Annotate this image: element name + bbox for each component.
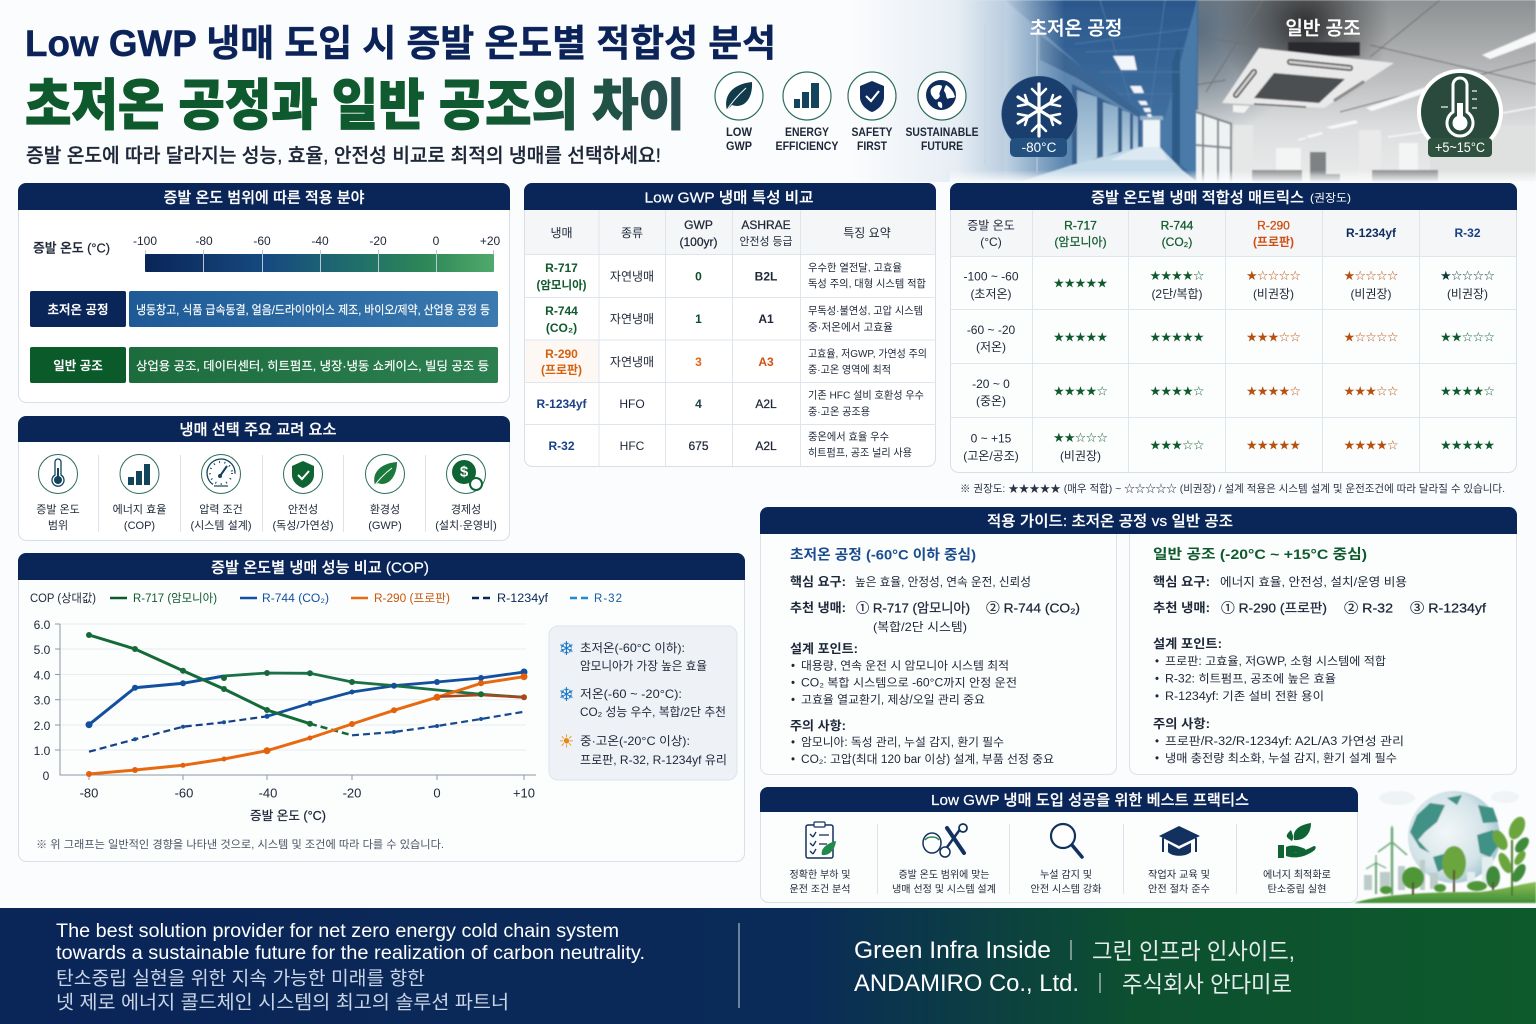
- guide column: ultra-low: ② R-744 (CO₂): [986, 600, 1080, 616]
- hero photo: ultra-low temperature corridor: [850, 0, 1197, 182]
- practice: worker education mortarboard: 안전 절차 준수: [1148, 882, 1210, 896]
- factor: safety: 안전성: [288, 503, 318, 516]
- guide column: ultra-low: •: [791, 660, 795, 672]
- guide column: general AC: 핵심 요구:: [1153, 574, 1210, 589]
- panel: key selection factors: 냉매 선택 주요 교려 요소: [180, 422, 337, 438]
- line chart: 4.0: [34, 668, 51, 682]
- row R-717: 우수한 열전달, 고효율: [808, 262, 902, 274]
- matrix row -20 to 0: ★★★★☆: [1150, 384, 1204, 400]
- matrix header: (암모니아): [1054, 235, 1107, 249]
- guide column: general AC: 프로판/R-32/R-1234yf: A2L/A3 가연성 관리: [1165, 735, 1404, 748]
- factor: economy: 경제성: [451, 503, 481, 516]
- guide column: ultra-low: 대용량, 연속 운전 시 암모니아 시스템 최적: [801, 660, 1009, 672]
- guide column: general AC: •: [1155, 674, 1159, 686]
- matrix row 0 to +15: ★★★☆☆: [1150, 438, 1204, 454]
- guide column: ultra-low: •: [791, 678, 795, 690]
- line chart: 1.0: [34, 744, 51, 758]
- footer English statement: [56, 921, 645, 964]
- matrix header: [967, 218, 1481, 249]
- practice: load analysis: 운전 조건 분석: [790, 884, 850, 896]
- row R-744: 무독성·불연성, 고압 시스템: [808, 304, 923, 317]
- matrix row -20 to 0: ★★★☆☆: [1344, 384, 1398, 400]
- footer English statement: towards a sustainable future for the realization of carbon neutrality.: [56, 943, 645, 964]
- table header: 특징 요약: [843, 225, 891, 240]
- guide column: ultra-low: 초저온 공정 (-60°C 이하 중심): [790, 546, 976, 562]
- matrix row -100 to -60: (초저온): [970, 287, 1012, 301]
- matrix row -60 to -20: (저온): [976, 340, 1006, 354]
- practice: leak detection magnifier: 누설 감지 및: [1040, 869, 1092, 881]
- chart callout: [549, 626, 737, 780]
- chart footnote: ※ 위 그래프는 일반적인 경향을 나타낸 것으로, 시스템 및 조건에 따라 다를 수 있습니다.: [36, 837, 444, 851]
- line chart: 0: [433, 786, 441, 800]
- row R-1234yf: 4: [695, 397, 702, 411]
- factor: environment: (GWP): [368, 520, 402, 532]
- row R-717: R-717: [545, 261, 578, 275]
- badge: snowflake -80°C: -80°C: [1022, 140, 1057, 155]
- factor: pressure: (시스템 설계): [191, 519, 251, 532]
- chart legend: R-290 (프로판): [374, 592, 450, 605]
- line chart: -60: [175, 786, 193, 800]
- factor: energy efficiency: [113, 454, 166, 532]
- factor: environment: 환경성: [370, 503, 400, 516]
- temperature scale: 0: [433, 234, 440, 248]
- chart callout: 초저온(-60°C 이하):: [580, 641, 685, 655]
- guide column: ultra-low: 핵심 요구:: [790, 574, 846, 589]
- icon: snowflake low: ❄: [559, 684, 574, 706]
- temperature scale: -20: [369, 234, 387, 248]
- matrix header: 증발 온도: [967, 218, 1015, 232]
- icon: sustainable future globe: SUSTAINABLE: [906, 127, 979, 139]
- main title line 1: Low GWP 냉매 도입 시 증발 온도별 적합성 분석: [25, 23, 776, 64]
- factor: energy efficiency: 에너지 효율: [113, 503, 166, 516]
- guide column: ultra-low: [790, 546, 1080, 766]
- panel: suitability matrix: [950, 183, 1517, 472]
- practice: worker education mortarboard: 작업자 교육 및: [1148, 868, 1210, 881]
- practice: system design tools: 증발 온도 범위에 맞는: [898, 868, 990, 881]
- practice: leak detection magnifier: [1030, 824, 1102, 896]
- row R-744: 자연냉매: [610, 312, 654, 326]
- matrix header: (프로판): [1253, 235, 1294, 249]
- illustration: globe, wind turbines and plants: [1354, 791, 1536, 903]
- guide column: general AC: 설계 포인트:: [1153, 637, 1222, 651]
- row R-32: 히트펌프, 공조 널리 사용: [808, 447, 912, 459]
- icon: low GWP leaf: [715, 72, 763, 153]
- guide column: general AC: 냉매 충전량 최소화, 누설 감지, 환기 설계 필수: [1165, 752, 1397, 765]
- factor: safety: (독성/가연성): [273, 519, 333, 532]
- guide column: general AC: 일반 공조 (-20°C ~ +15°C 중심): [1153, 546, 1367, 562]
- row R-32: A2L: [755, 439, 777, 453]
- panel: application by evaporation temperature: [18, 183, 510, 402]
- practice: carbon neutrality hand and leaf: 에너지 최적화로: [1263, 869, 1331, 881]
- line chart: +10: [513, 786, 535, 800]
- line chart: 0: [43, 769, 50, 783]
- panel: COP performance chart: [18, 553, 745, 862]
- practice: carbon neutrality hand and leaf: 탄소중립 실현: [1268, 882, 1326, 896]
- matrix row -60 to -20: [967, 323, 1495, 354]
- matrix row -100 to -60: ★☆☆☆☆: [1440, 269, 1495, 284]
- line chart: 3.0: [34, 694, 51, 708]
- row R-290: 자연냉매: [610, 355, 654, 369]
- factor: economy: $: [460, 464, 469, 480]
- line chart: -20: [343, 786, 361, 800]
- badge: thermometer +5~15°C: [1419, 71, 1501, 157]
- matrix row -20 to 0: (중온): [976, 394, 1006, 408]
- table header: GWP: [684, 218, 713, 232]
- hero label: ultra-low: 초저온 공정: [1030, 18, 1122, 40]
- guide column: ultra-low: ① R-717 (암모니아): [856, 600, 970, 616]
- factor: temperature range: [36, 454, 80, 532]
- matrix row -100 to -60: (비권장): [1253, 287, 1294, 301]
- badge: thermometer +5~15°C: +5~15°C: [1435, 140, 1485, 155]
- line chart: [34, 618, 536, 800]
- row R-32: [548, 431, 912, 459]
- row R-1234yf: R-1234yf: [536, 397, 588, 411]
- line chart: -80: [80, 786, 98, 800]
- guide column: general AC: •: [1155, 753, 1159, 765]
- matrix row -100 to -60: ★☆☆☆☆: [1246, 269, 1301, 284]
- panel: Low GWP refrigerant property table: [524, 183, 936, 466]
- row: general AC: [30, 347, 498, 383]
- guide column: ultra-low: •: [791, 737, 795, 749]
- practice: system design tools: 냉매 선정 및 시스템 설계: [892, 884, 996, 896]
- practice: leak detection magnifier: 안전 시스템 강화: [1030, 884, 1102, 896]
- guide column: general AC: 주의 사항:: [1153, 716, 1210, 731]
- guide column: ultra-low: 추천 냉매:: [790, 600, 846, 615]
- chart callout: CO₂ 성능 우수, 복합/2단 추천: [580, 704, 726, 719]
- matrix row -20 to 0: ★★★★☆: [1053, 384, 1108, 400]
- matrix row -100 to -60: (2단/복합): [1151, 287, 1203, 301]
- matrix row -100 to -60: (비권장): [1350, 287, 1392, 301]
- guide column: ultra-low: 설계 포인트:: [790, 642, 858, 656]
- row R-290: A3: [758, 355, 774, 369]
- row R-32: 675: [688, 439, 709, 453]
- icon: sun: ☀: [558, 732, 575, 752]
- guide column: ultra-low: CO₂ 복합 시스템으로 -60°C까지 안정 운전: [801, 676, 1017, 690]
- guide column: general AC: [1153, 546, 1486, 765]
- temperature scale: -60: [253, 234, 271, 248]
- row: ultra-low process: 냉동창고, 식품 급속동결, 얼음/드라이아이스 제조, 바이오/제약, 산업용 공정 등: [136, 302, 490, 317]
- table header: (100yr): [679, 235, 718, 249]
- guide column: ultra-low: 암모니아: 독성 관리, 누설 감지, 환기 필수: [801, 736, 1004, 749]
- matrix row -100 to -60: ★☆☆☆☆: [1344, 269, 1398, 284]
- matrix row -20 to 0: ★★★★☆: [1246, 384, 1301, 400]
- matrix row -100 to -60: ★★★★★: [1053, 276, 1108, 292]
- factor: pressure: 압력 조건: [199, 503, 243, 516]
- matrix row -60 to -20: -60 ~ -20: [967, 323, 1016, 337]
- matrix row -20 to 0: [972, 377, 1495, 408]
- row R-744: A1: [758, 312, 774, 326]
- row R-32: R-32: [548, 439, 575, 453]
- subtitle: 증발 온도에 따라 달라지는 성능, 효율, 안전성 비교로 최적의 냉매를 선택하세요!: [26, 145, 661, 167]
- chart legend: R-1234yf: [497, 593, 549, 605]
- guide column: general AC: ③ R-1234yf: [1410, 600, 1486, 616]
- factor: temperature range: 증발 온도: [36, 503, 80, 516]
- panel: suitability matrix: 증발 온도별 냉매 적합성 매트릭스: [1091, 190, 1304, 206]
- icon: safety shield: [848, 72, 896, 153]
- chart legend: R-744 (CO₂): [262, 593, 329, 605]
- matrix row 0 to +15: ★★★★★: [1246, 438, 1301, 454]
- matrix row -60 to -20: ★★★★★: [1053, 330, 1108, 346]
- row: ultra-low process: 초저온 공정: [48, 303, 108, 317]
- temperature scale: +20: [480, 234, 501, 248]
- guide column: ultra-low: 고효율 열교환기, 제상/오일 관리 중요: [801, 692, 985, 706]
- line chart: 6.0: [34, 618, 51, 632]
- footer brand: 그린 인프라 인사이드,: [1092, 938, 1295, 964]
- temperature scale: -80: [195, 234, 213, 248]
- factor: economy: [435, 454, 497, 532]
- chart legend: [30, 592, 622, 605]
- guide column: ultra-low: •: [791, 754, 795, 766]
- guide column: general AC: 에너지 효율, 안전성, 설치/운영 비용: [1220, 575, 1407, 589]
- matrix row 0 to +15: (비권장): [1060, 449, 1101, 463]
- row R-744: 1: [695, 312, 702, 326]
- icon: safety shield: FIRST: [857, 141, 887, 153]
- badge: snowflake -80°C: [1002, 76, 1078, 157]
- factor: temperature range: 범위: [48, 519, 68, 532]
- row R-290: 중·고온 영역에 최적: [808, 364, 891, 376]
- guide column: general AC: •: [1155, 736, 1159, 748]
- matrix header: R-744: [1161, 218, 1194, 232]
- icon: low GWP leaf: GWP: [726, 141, 752, 153]
- guide column: general AC: ① R-290 (프로판): [1221, 600, 1327, 616]
- table header: 안전성 등급: [740, 235, 792, 248]
- matrix row -60 to -20: ★★★★★: [1150, 330, 1204, 346]
- axis label: 증발 온도 (°C): [33, 240, 110, 256]
- footer brand: 주식회사 안다미로: [1122, 971, 1292, 997]
- matrix row -20 to 0: -20 ~ 0: [972, 377, 1010, 391]
- row R-744: R-744: [545, 304, 578, 318]
- chart legend: R-717 (암모니아): [133, 592, 217, 605]
- matrix row -60 to -20: ★★☆☆☆: [1440, 330, 1495, 346]
- row R-744: 중·저온에서 고효율: [808, 322, 893, 334]
- row R-290: (프로판): [541, 363, 582, 377]
- panel: suitability matrix: (권장도): [1310, 192, 1351, 204]
- panel: application by evaporation temperature: 증발 온도 범위에 따른 적용 분야: [164, 190, 365, 206]
- icon: energy efficiency bars: [776, 72, 839, 153]
- icon: sustainable future globe: FUTURE: [921, 141, 963, 153]
- footer Korean statement: 탄소중립 실현을 위한 지속 가능한 미래를 향한: [56, 968, 425, 990]
- temperature scale: -40: [311, 234, 329, 248]
- panel: application guide: 적용 가이드: 초저온 공정 vs 일반 공조: [987, 513, 1233, 530]
- guide column: ultra-low: CO₂: 고압(최대 120 bar 이상) 설계, 부품 선정 중요: [801, 753, 1054, 766]
- matrix footnote: ※ 권장도: ★★★★★ (매우 적합) ~ ☆☆☆☆☆ (비권장) / 설계 적용은 시스템 설계 및 운전조건에 따라 달라질 수 있습니다.: [960, 483, 1505, 495]
- hero label: general AC: 일반 공조: [1285, 18, 1361, 40]
- chart callout: 프로판, R-32, R-1234yf 유리: [580, 753, 727, 767]
- factor: energy efficiency: (COP): [124, 520, 155, 532]
- footer band: [0, 908, 1536, 1024]
- guide column: general AC: •: [1155, 691, 1159, 703]
- guide column: general AC: R-32: 히트펌프, 공조에 높은 효율: [1165, 672, 1336, 686]
- matrix row -20 to 0: ★★★★☆: [1440, 384, 1495, 400]
- panel: COP performance chart: 증발 온도별 냉매 성능 비교 (COP): [211, 560, 429, 576]
- row R-290: 3: [695, 355, 702, 369]
- main title line 2: 초저온 공정과 일반 공조의 차이: [25, 74, 685, 136]
- factor: economy: (설치·운영비): [435, 519, 497, 532]
- chart callout: 저온(-60 ~ -20°C):: [580, 687, 682, 701]
- icon: low GWP leaf: LOW: [726, 127, 752, 139]
- matrix header: R-32: [1454, 226, 1481, 240]
- panel: Low GWP refrigerant property table: Low GWP 냉매 특성 비교: [644, 190, 814, 206]
- panel: application guide: [760, 507, 1517, 774]
- table header: [550, 218, 891, 249]
- matrix row -100 to -60: -100 ~ -60: [963, 270, 1019, 284]
- table header: ASHRAE: [741, 218, 791, 232]
- icon: sustainable future globe: [906, 72, 979, 153]
- matrix row 0 to +15: (고온/공조): [963, 449, 1019, 463]
- guide column: general AC: •: [1155, 656, 1159, 668]
- row R-1234yf: [536, 390, 924, 418]
- matrix row -60 to -20: ★★★☆☆: [1246, 330, 1301, 346]
- row R-290: 고효율, 저GWP, 가연성 주의: [808, 348, 927, 360]
- line chart: -40: [259, 786, 277, 800]
- footer brand: Green Infra Inside: [854, 937, 1051, 964]
- guide column: ultra-low: 높은 효율, 안정성, 연속 운전, 신뢰성: [855, 575, 1031, 589]
- chart legend: COP (상대값): [30, 592, 96, 605]
- matrix row -60 to -20: ★☆☆☆☆: [1344, 330, 1398, 346]
- panel: key selection factors: [18, 416, 510, 540]
- row R-717: 자연냉매: [610, 270, 654, 284]
- row R-290: R-290: [545, 347, 578, 361]
- guide column: general AC: 추천 냉매:: [1153, 600, 1210, 615]
- row R-717: [537, 261, 926, 292]
- guide column: general AC: 프로판: 고효율, 저GWP, 소형 시스템에 적합: [1165, 655, 1386, 668]
- row: ultra-low process: [30, 291, 498, 327]
- row R-744: (CO₂): [546, 321, 577, 335]
- footer English statement: The best solution provider for net zero energy cold chain system: [56, 921, 619, 942]
- row R-717: (암모니아): [537, 279, 587, 292]
- row R-1234yf: 중·고온 공조용: [808, 406, 870, 418]
- matrix row 0 to +15: ★★★★☆: [1344, 438, 1398, 454]
- matrix row 0 to +15: ★★★★★: [1440, 438, 1495, 454]
- factor: safety: [273, 454, 333, 532]
- matrix header: (°C): [980, 235, 1002, 249]
- practice: load analysis: [790, 822, 850, 896]
- practice: system design tools: [892, 824, 996, 896]
- row R-290: [541, 347, 927, 377]
- factor: pressure: [191, 454, 251, 532]
- row R-1234yf: A2L: [755, 397, 777, 411]
- footer Korean statement: 넷 제로 에너지 콜드체인 시스템의 최고의 솔루션 파트너: [56, 992, 509, 1014]
- table header: 냉매: [550, 226, 573, 240]
- row R-717: 0: [695, 270, 702, 284]
- matrix row 0 to +15: ★★☆☆☆: [1053, 431, 1108, 446]
- matrix row -100 to -60: (비권장): [1447, 287, 1488, 301]
- x axis title: 증발 온도 (°C): [250, 809, 326, 823]
- chart legend: R-32: [594, 593, 622, 605]
- matrix row -100 to -60: [963, 269, 1495, 301]
- hero fade to page: [950, 170, 1536, 183]
- line chart: 2.0: [34, 719, 51, 733]
- icon: energy efficiency bars: EFFICIENCY: [776, 141, 839, 153]
- guide column: general AC: R-1234yf: 기존 설비 전환 용이: [1165, 690, 1324, 703]
- row R-1234yf: HFO: [619, 397, 645, 411]
- matrix header: R-1234yf: [1346, 226, 1397, 240]
- temperature scale: -100: [133, 234, 157, 248]
- icon: safety shield: SAFETY: [852, 127, 893, 139]
- practice: worker education mortarboard: [1148, 826, 1210, 896]
- chart callout: 암모니아가 가장 높은 효율: [580, 659, 707, 673]
- footer brand: [854, 937, 1295, 997]
- icon: energy efficiency bars: ENERGY: [785, 127, 829, 139]
- row: general AC: 상업용 공조, 데이터센터, 히트펌프, 냉장·냉동 쇼케이스, 빌딩 공조 등: [136, 359, 489, 373]
- row: general AC: 일반 공조: [53, 359, 103, 373]
- row R-1234yf: 기존 HFC 설비 호환성 우수: [808, 390, 924, 402]
- matrix row 0 to +15: 0 ~ +15: [971, 432, 1012, 446]
- hero photo: general air-conditioning office: [1196, 0, 1536, 182]
- matrix header: (CO₂): [1162, 235, 1192, 249]
- matrix row 0 to +15: [963, 431, 1495, 463]
- factor: environment: [366, 454, 404, 532]
- footer Korean statement: [56, 968, 509, 1014]
- panel: best practices: Low GWP 냉매 도입 성공을 위한 베스트 프랙티스: [931, 792, 1249, 809]
- line chart: 5.0: [34, 643, 51, 657]
- icon: snowflake: ❄: [559, 638, 574, 660]
- chart callout: 중·고온(-20°C 이상):: [580, 734, 690, 748]
- table header: 종류: [621, 226, 643, 240]
- guide column: ultra-low: (복합/2단 시스템): [873, 620, 967, 634]
- row R-32: HFC: [620, 439, 645, 453]
- practice: load analysis: 정확한 부하 및: [790, 868, 850, 881]
- panel: best practices: [760, 787, 1358, 902]
- guide column: ultra-low: •: [791, 694, 795, 706]
- matrix header: R-717: [1064, 218, 1097, 232]
- guide column: ultra-low: 주의 사항:: [790, 718, 846, 733]
- guide column: general AC: ② R-32: [1344, 600, 1393, 616]
- matrix row -100 to -60: ★★★★☆: [1150, 269, 1204, 284]
- row R-717: 독성 주의, 대형 시스템 적합: [808, 278, 926, 290]
- footer brand: ANDAMIRO Co., Ltd.: [854, 970, 1079, 997]
- row R-32: 중온에서 효율 우수: [808, 431, 889, 443]
- practice: carbon neutrality hand and leaf: [1263, 823, 1331, 896]
- temperature scale: [133, 234, 501, 272]
- row R-717: B2L: [755, 270, 777, 284]
- matrix header: R-290: [1257, 218, 1290, 232]
- row R-744: [545, 304, 923, 335]
